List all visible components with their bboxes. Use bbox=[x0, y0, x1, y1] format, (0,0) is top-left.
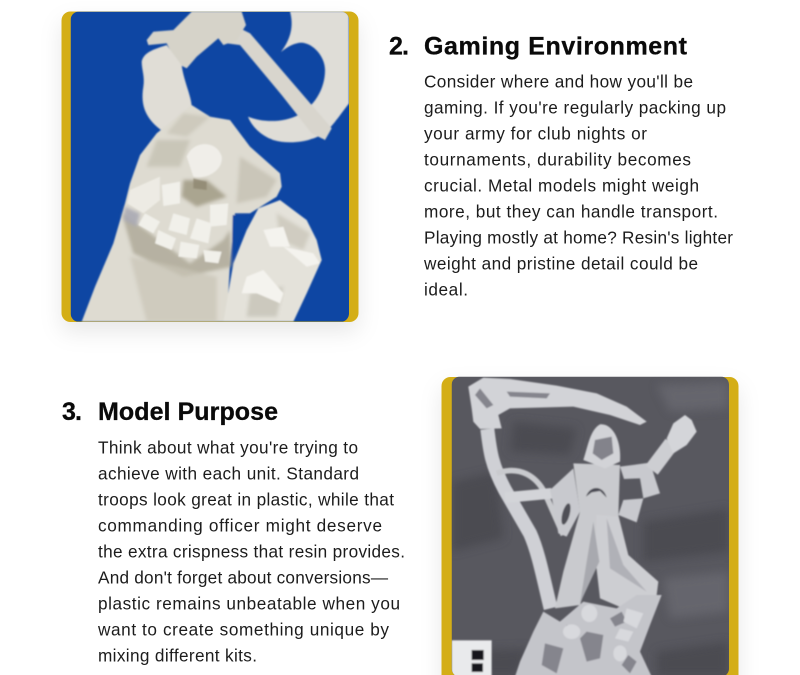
base texture bbox=[542, 612, 637, 673]
section 2 body: Playing mostly at home? Resin's lighter bbox=[424, 228, 733, 248]
section 2: gaming environment text bbox=[389, 32, 733, 300]
torso and legs bbox=[82, 105, 282, 322]
gold card backing bbox=[442, 377, 738, 675]
skull face bbox=[593, 437, 613, 460]
robe folds bbox=[580, 522, 599, 603]
chest plates bbox=[127, 177, 228, 263]
section 3 body: want to create something unique by bbox=[97, 620, 389, 640]
section 2 body: your army for club nights or bbox=[424, 124, 647, 144]
skeletal hand bbox=[667, 415, 697, 453]
section 3 body: And don't forget about conversions— bbox=[98, 568, 389, 588]
small white cube with dark marks bbox=[452, 640, 492, 675]
section 2 heading: 2. bbox=[389, 32, 409, 60]
right leg of robe bbox=[595, 512, 658, 608]
figure card: reaper miniature on grey background bbox=[442, 377, 738, 675]
section 2 body: crucial. Metal models might weigh bbox=[424, 176, 699, 196]
section 2 heading: Gaming Environment bbox=[424, 32, 688, 60]
chest ribcage opening bbox=[586, 488, 607, 498]
face bbox=[187, 144, 222, 177]
left sleeve hole bbox=[560, 502, 572, 526]
left leg of robe bbox=[555, 512, 598, 608]
axe handle bbox=[227, 27, 332, 140]
photo: orc miniature bbox=[71, 12, 349, 322]
raised hand and forearm bbox=[147, 12, 246, 68]
section 2 body: more, but they can handle transport. bbox=[424, 202, 718, 222]
axe head bbox=[248, 12, 349, 142]
section 3 body: achieve with each unit. Standard bbox=[98, 464, 359, 484]
section 3 heading: 3. bbox=[62, 398, 82, 426]
forearm bbox=[652, 443, 672, 470]
section 2 body: weight and pristine detail could be bbox=[423, 254, 698, 274]
blue gap between body and shield bbox=[231, 214, 242, 264]
section 2 body: tournaments, durability becomes bbox=[424, 150, 691, 170]
right sleeve bbox=[618, 463, 660, 522]
shield bbox=[223, 200, 322, 322]
mouth bbox=[193, 178, 207, 190]
shield relief bbox=[242, 227, 320, 303]
torso bbox=[573, 463, 620, 517]
section 3 body: the extra crispness that resin provides. bbox=[98, 542, 405, 562]
mottled backdrop bbox=[452, 382, 729, 675]
armour shading bbox=[122, 113, 310, 322]
hood bbox=[583, 424, 620, 468]
figure card: orc miniature on blue background bbox=[62, 12, 358, 322]
upper arm bbox=[140, 44, 193, 131]
gold card backing bbox=[62, 12, 358, 322]
arm holding scythe bbox=[505, 493, 552, 498]
section 2 body: Consider where and how you'll be bbox=[424, 72, 693, 92]
scythe ribs bbox=[475, 388, 550, 408]
section 2 body: ideal. bbox=[424, 280, 468, 300]
section 3 body: troops look great in plastic, while that bbox=[98, 490, 394, 510]
section 3 heading: Model Purpose bbox=[98, 398, 278, 426]
left sleeve bbox=[550, 468, 580, 537]
skull base bbox=[515, 595, 662, 675]
scythe blade bbox=[468, 378, 647, 429]
section 3 body: mixing different kits. bbox=[98, 646, 257, 666]
photo: reaper miniature bbox=[452, 377, 729, 675]
section 3: model purpose text bbox=[62, 398, 405, 666]
section 3 body bbox=[97, 438, 405, 666]
section 3 body: plastic remains unbeatable when you bbox=[98, 594, 400, 614]
section 3 body: Think about what you're trying to bbox=[98, 438, 358, 458]
scythe shaft bbox=[487, 429, 551, 608]
section 2 body bbox=[423, 72, 733, 300]
section 3 body: commanding officer might deserve bbox=[98, 516, 382, 536]
section 2 body: gaming. If you're regularly packing up bbox=[424, 98, 726, 118]
curved shaft brace bbox=[497, 471, 563, 535]
